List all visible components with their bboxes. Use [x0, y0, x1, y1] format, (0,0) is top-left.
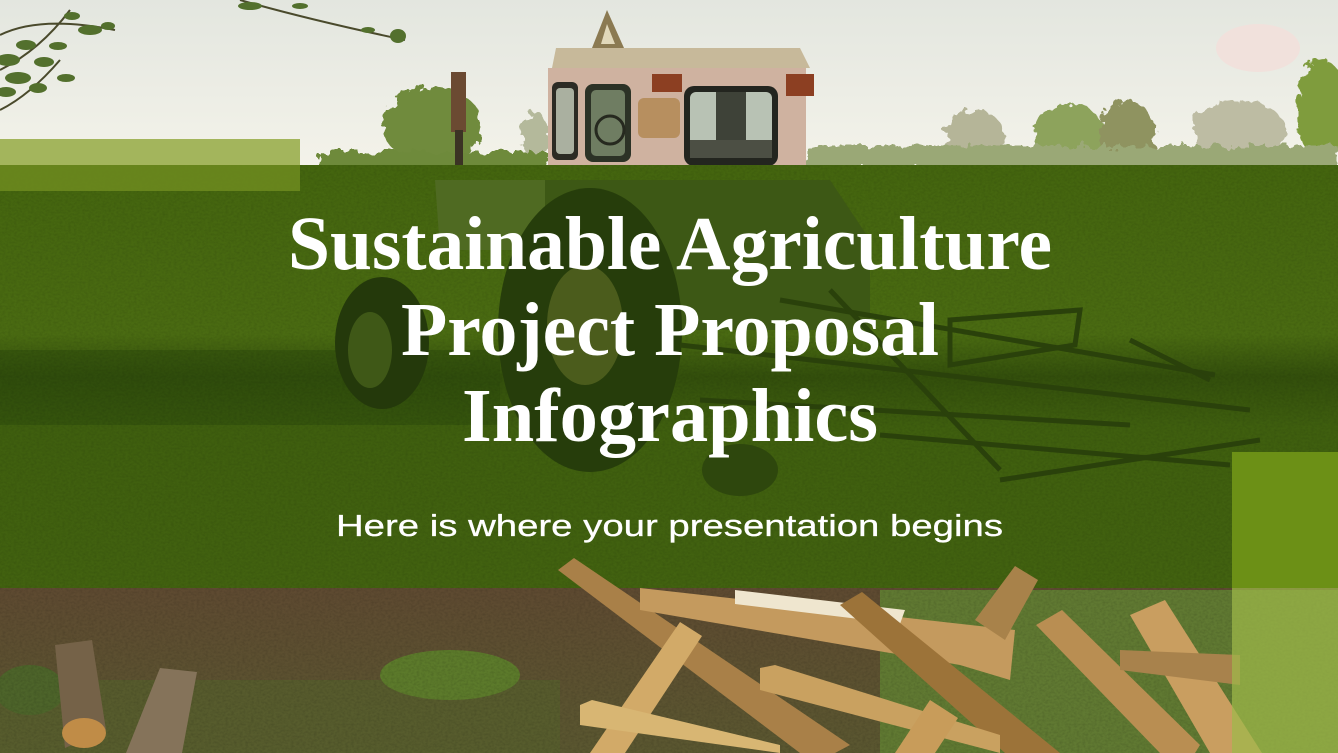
background: tractor body and harrow [335, 180, 1260, 496]
background: green field [0, 165, 1338, 588]
background: branches and leaves top left [0, 0, 406, 110]
background: tractor cabin [451, 10, 814, 168]
background: distant tree line [320, 60, 1338, 170]
title [288, 202, 1052, 458]
title: Sustainable Agriculture [288, 202, 1052, 286]
title: Project Proposal [401, 288, 939, 372]
background: dirt ground [0, 588, 1338, 753]
title: Infographics [462, 374, 878, 458]
background: wooden sawhorses [558, 558, 1262, 753]
subtitle: Here is where your presentation begins [336, 508, 1003, 543]
background: cut logs [55, 640, 197, 753]
background: sky [0, 0, 1338, 170]
accent block: top left [0, 139, 300, 191]
accent block: bottom right [1232, 452, 1338, 753]
